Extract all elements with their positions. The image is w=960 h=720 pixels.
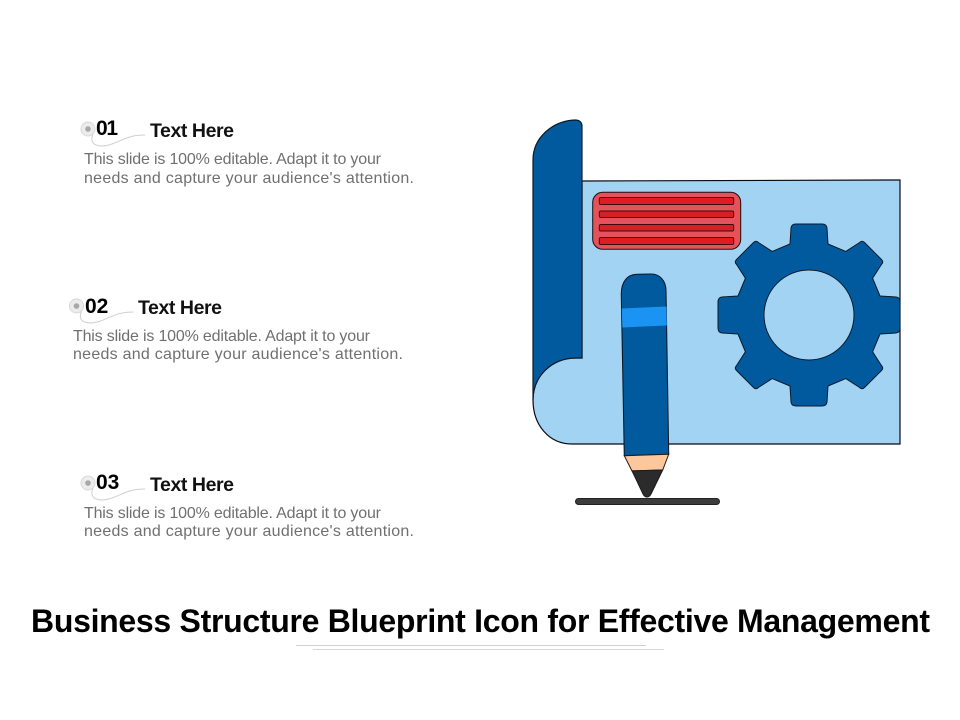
baseline stroke xyxy=(576,498,720,504)
text block: item 01: needs and capture your audience's attention. xyxy=(84,170,414,187)
text block: item 02 xyxy=(73,328,403,363)
item 03 xyxy=(81,471,414,540)
blueprint scroll roll xyxy=(533,120,582,400)
text block: item 01 xyxy=(84,151,414,187)
text block: item 02: This slide is 100% editable. Adapt it to your xyxy=(73,328,371,345)
blueprint illustration xyxy=(533,120,900,504)
red title block xyxy=(593,192,741,249)
text block: item 03 xyxy=(84,505,414,540)
icon: pencil xyxy=(621,274,669,497)
title underline xyxy=(296,645,664,650)
item 02 xyxy=(70,295,403,363)
icon: item 03 node and swoosh xyxy=(81,476,145,500)
item 01 xyxy=(81,117,414,187)
text block: item 01: This slide is 100% editable. Adapt it to your xyxy=(84,151,382,168)
heading: item 02: Text Here xyxy=(138,297,222,319)
icon: gear xyxy=(718,224,900,406)
text block: item 02: needs and capture your audience's attention. xyxy=(73,346,403,363)
number 02: 02 xyxy=(85,295,108,318)
blueprint sheet xyxy=(533,180,900,444)
icon: item 02 node and swoosh xyxy=(70,299,134,323)
text block: item 03: needs and capture your audience's attention. xyxy=(84,523,414,540)
number 01: 01 xyxy=(96,117,118,140)
icon: item 01 node and swoosh xyxy=(81,122,145,146)
text block: item 03: This slide is 100% editable. Adapt it to your xyxy=(84,505,382,522)
heading: item 03: Text Here xyxy=(150,474,234,496)
heading: item 01: Text Here xyxy=(150,120,234,142)
title: Business Structure Blueprint Icon for Effective Management xyxy=(31,603,930,639)
number 03: 03 xyxy=(96,471,119,494)
